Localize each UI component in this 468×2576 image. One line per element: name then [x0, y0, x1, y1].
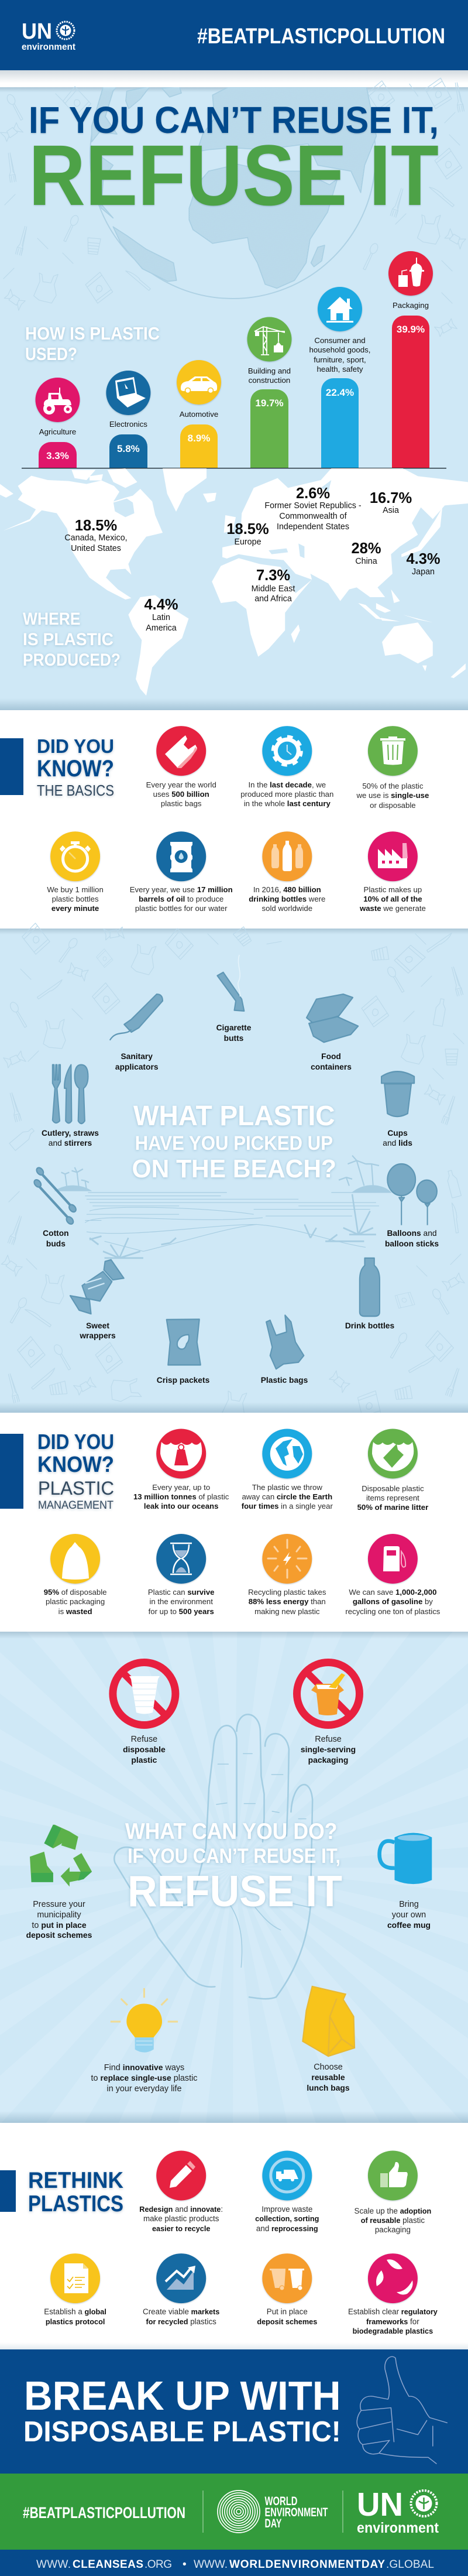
map statistics: 16.7% [370, 490, 412, 506]
heading: DID YOU [37, 735, 114, 757]
beach item labels: Sanitary [121, 1052, 153, 1061]
panel: what plastic have you picked up on the beach [0, 923, 468, 1422]
logo: world environment day: DAY [264, 2517, 282, 2530]
action: deposit schemes [257, 2253, 317, 2326]
bar: consumer goods: household goods, [309, 345, 371, 354]
beach item labels: and stirrers [49, 1139, 92, 1147]
map statistics: United States [71, 544, 121, 553]
action: refuse single-serving packaging: packaging [308, 1755, 348, 1765]
beach item labels: Drink bottles [345, 1321, 394, 1330]
logo: world environment day: WORLD [264, 2495, 297, 2508]
panel: did you know plastic management [0, 1413, 468, 1632]
action: refuse disposable plastic [113, 1663, 176, 1765]
fact: plastic bags [146, 726, 216, 808]
fact: plastic bottles per minute: every minute [51, 904, 99, 913]
bar chart: plastic use by sector [22, 251, 446, 468]
bar: building and construction: construction [249, 376, 290, 385]
action: redesign [139, 2151, 223, 2233]
fact: last decade: in the whole last century [244, 799, 331, 808]
fact: barrels of oil: plastic bottles for our water [135, 904, 228, 913]
fact: packaging wasted: is wasted [58, 1607, 92, 1616]
heading: PLASTICS [28, 2191, 123, 2217]
fact: last decade: In the last decade, we [248, 780, 326, 789]
heading: WHAT CAN YOU DO? [125, 1819, 337, 1844]
fact: single use [356, 726, 429, 810]
panel: break up banner [0, 2349, 468, 2474]
fact: survive 500 years: Plastic can survive [148, 1588, 215, 1597]
beach item labels: balloon sticks [385, 1239, 439, 1248]
action: improve waste collection: collection, sorting [255, 2215, 319, 2223]
action: regulatory frameworks [348, 2253, 438, 2335]
bar: agriculture: Agriculture [39, 427, 76, 436]
panel: footer links: WWW. [194, 2558, 228, 2571]
action: innovative ways [91, 1988, 198, 2094]
action: markets: Create viable markets [143, 2307, 219, 2316]
heading [0, 735, 114, 799]
action: protocol: plastics protocol [46, 2318, 105, 2326]
heading: ON THE BEACH? [132, 1155, 336, 1183]
panel: footer links: WORLDENVIRONMENTDAY [229, 2558, 385, 2571]
icon: drink bottle [360, 1258, 380, 1316]
heading: how is plastic used [25, 323, 160, 364]
fact: barrels of oil: barrels of oil to produce [139, 895, 223, 903]
icon: sanitary applicator [110, 994, 163, 1040]
fact: share of waste [359, 831, 426, 913]
fact: last decade: produced more plastic than [240, 790, 333, 799]
fact: plastic bags: Every year the world [146, 780, 216, 789]
fact: drinking bottles: In 2016, 480 billion [253, 885, 321, 894]
heading: DISPOSABLE PLASTIC! [23, 2416, 341, 2448]
bar: automotive: Automotive [180, 410, 218, 419]
fact: packaging wasted: 95% of disposable [44, 1588, 106, 1597]
map statistics: China [355, 557, 377, 566]
panel: did you know the basics [0, 710, 468, 929]
heading: THE BASICS [37, 782, 114, 799]
bar: consumer goods: 22.4% [326, 387, 354, 398]
icon: thumbs up line art [357, 2356, 447, 2464]
fact: gasoline [345, 1534, 441, 1616]
action: coffee mug: your own [392, 1910, 426, 1920]
fact: drinking bottles: sold worldwide [262, 904, 312, 913]
UN environment logo: UN [22, 19, 52, 44]
map statistics: 18.5% [226, 521, 269, 537]
logo: world environment day [218, 2491, 328, 2533]
action: markets: for recycled plastics [146, 2317, 216, 2326]
UN environment logo [22, 19, 76, 52]
map statistics: 4.3% [406, 551, 441, 567]
fact: last decade [240, 726, 333, 808]
action: improve waste collection: and reprocessing [256, 2224, 318, 2233]
heading: KNOW? [37, 756, 114, 782]
action: redesign: easier to recycle [152, 2225, 210, 2233]
action: deposit schemes: deposit schemes [26, 1930, 92, 1940]
heading: where is plastic produced: IS PLASTIC [23, 630, 113, 649]
fact: single use: 50% of the plastic [362, 782, 424, 790]
bar: consumer goods: Consumer and [314, 336, 366, 345]
icon: cigarette butt [217, 955, 244, 1011]
bar: automotive: 8.9% [188, 433, 210, 444]
fact: circle the earth: away can circle the Earth [242, 1492, 332, 1501]
action: regulatory frameworks: frameworks for [366, 2317, 419, 2326]
heading: RETHINK [28, 2168, 123, 2193]
fact: packaging wasted: plastic packaging [46, 1597, 105, 1606]
action: innovative ways: to replace single-use plastic [91, 2073, 198, 2083]
action: improve waste collection: Improve waste [261, 2205, 312, 2214]
heading: where is plastic produced: PRODUCED? [23, 650, 121, 670]
panel: how plastic is used and where produced [0, 13, 468, 710]
map statistics: Japan [412, 567, 435, 577]
background doodles [1, 77, 466, 338]
icon: crisp packet [167, 1319, 201, 1365]
fact: drinking bottles: drinking bottles were [249, 895, 325, 903]
fact: plastic bottles per minute: plastic bottles [52, 895, 99, 903]
fact: survive 500 years: in the environment [149, 1597, 213, 1606]
map statistics [64, 485, 441, 633]
heading: where is plastic produced [23, 609, 121, 670]
fact: recycling energy: making new plastic [254, 1607, 320, 1616]
heading: WHAT PLASTIC [133, 1101, 335, 1132]
bar: building and construction: Building and [248, 366, 291, 375]
fact: recycling energy [248, 1534, 326, 1616]
map statistics: Europe [234, 537, 261, 547]
icon: balloons [387, 1164, 437, 1225]
heading [125, 1819, 342, 1916]
heading [0, 2168, 123, 2217]
map statistics: America [146, 624, 177, 633]
action: reusable packaging [355, 2151, 431, 2234]
sunburst rays [0, 1633, 468, 2102]
action: coffee mug: coffee mug [387, 1920, 431, 1930]
fact: drinking bottles [249, 831, 325, 913]
bar: consumer goods [309, 287, 371, 468]
map statistics: Latin [152, 613, 170, 622]
action: deposit schemes: Put in place [267, 2307, 308, 2316]
action: protocol [44, 2253, 106, 2326]
fact: plastic bags: plastic bags [161, 799, 202, 808]
fact: circle the earth: four times in a single year [242, 1502, 333, 1510]
icon: sweet wrapper [70, 1260, 124, 1314]
action: deposit schemes: deposit schemes [257, 2318, 317, 2326]
action: coffee mug [380, 1833, 432, 1930]
heading [23, 2373, 341, 2448]
action: refuse disposable plastic: Refuse [131, 1735, 157, 1744]
action: reusable packaging: Scale up the adoption [355, 2207, 431, 2215]
background doodles [1, 923, 464, 1422]
logo: UN environment: environment [357, 2520, 439, 2536]
title: IF YOU CAN’T REUSE IT, [29, 99, 439, 141]
heading [132, 1101, 336, 1183]
fact: share of waste: Plastic makes up [364, 885, 422, 894]
action: deposit schemes: Pressure your [33, 1900, 85, 1909]
panel: footer links: .ORG [144, 2558, 172, 2571]
heading: HAVE YOU PICKED UP [135, 1132, 333, 1155]
fact: share of waste: 10% of all of the [363, 895, 422, 903]
beach item labels: butts [224, 1034, 244, 1043]
action: improve waste collection [255, 2151, 319, 2233]
action: redesign: make plastic products [143, 2214, 219, 2223]
beach item labels: Cutlery, straws [42, 1129, 99, 1138]
panel: footer links [0, 2550, 468, 2576]
map statistics: 18.5% [75, 518, 117, 534]
action: lunch bags [302, 1986, 355, 2092]
action: redesign: Redesign and innovate: [139, 2205, 223, 2214]
heading: how is plastic used: HOW IS PLASTIC [25, 323, 160, 344]
fact: marine litter [357, 1429, 428, 1512]
fact: leak into oceans [133, 1429, 229, 1510]
panel: footer links: WWW. [36, 2558, 71, 2571]
map statistics: Middle East [252, 584, 295, 594]
beach item labels: wrappers [79, 1331, 116, 1340]
fact: gasoline: recycling one ton of plastics [345, 1607, 441, 1616]
action: lunch bags: Choose [314, 2063, 343, 2072]
bar: building and construction: 19.7% [255, 398, 284, 409]
map statistics: Former Soviet Republics - [264, 501, 362, 511]
logo: world environment day: ENVIRONMENT [264, 2506, 328, 2519]
heading: KNOW? [37, 1453, 114, 1477]
fact: circle the earth [242, 1429, 333, 1510]
map statistics: Independent States [277, 522, 349, 532]
beach item labels: buds [46, 1239, 66, 1248]
icon: cotton buds [33, 1166, 77, 1225]
hatched globe [90, 87, 377, 299]
map statistics: 2.6% [296, 485, 330, 502]
fact: survive 500 years [148, 1534, 215, 1616]
bar: agriculture [35, 378, 80, 468]
bar: packaging: 39.9% [397, 324, 425, 335]
fact: barrels of oil: Every year, we use 17 million [130, 885, 233, 894]
action: refuse single-serving packaging: single-serving [301, 1745, 356, 1754]
bar: consumer goods: furniture, sport, [314, 355, 366, 364]
heading: IF YOU CAN’T REUSE IT, [128, 1845, 340, 1868]
fact: plastic bottles per minute: We buy 1 million [47, 885, 104, 894]
action: refuse single-serving packaging [297, 1663, 359, 1765]
fact: single use: or disposable [370, 801, 416, 810]
logo: UN environment [357, 2486, 439, 2536]
action: markets [143, 2253, 219, 2326]
items on the beach [33, 955, 437, 1369]
heading: REFUSE IT [128, 1866, 342, 1916]
action: innovative ways: Find innovative ways [104, 2063, 184, 2073]
bar: electronics: 5.8% [117, 443, 140, 454]
bar: packaging: Packaging [393, 301, 429, 310]
fact: circle the earth: The plastic we throw [252, 1483, 322, 1492]
fact: packaging wasted [44, 1534, 106, 1616]
icon: food container [307, 994, 358, 1042]
bar: consumer goods: health, safety [316, 365, 363, 374]
fact: leak into oceans: Every year, up to [152, 1483, 210, 1492]
logo: UN environment: UN [357, 2486, 403, 2523]
action: reusable packaging: of reusable plastic [361, 2216, 425, 2225]
fact: plastic bags: uses 500 billion [153, 790, 209, 799]
beach item labels: Cups [387, 1129, 408, 1138]
fact: marine litter: items represent [366, 1493, 419, 1502]
fact: marine litter: 50% of marine litter [357, 1503, 428, 1512]
beach item labels: Cigarette [216, 1023, 252, 1032]
hand outline [114, 1714, 312, 1999]
beach item labels: and lids [383, 1139, 412, 1147]
fact: survive 500 years: for up to 500 years [149, 1607, 214, 1616]
UN environment logo: environment [22, 42, 76, 52]
fact: leak into oceans: leak into our oceans [144, 1502, 218, 1510]
beach item labels [42, 1023, 439, 1385]
map statistics: Asia [383, 506, 399, 515]
hashtag: #BEATPLASTICPOLLUTION [23, 2504, 185, 2522]
action: deposit schemes: to put in place [32, 1920, 87, 1930]
map statistics: Canada, Mexico, [64, 533, 128, 543]
beach item labels: containers [311, 1063, 352, 1071]
bar: electronics [106, 371, 150, 468]
bar: automotive [177, 360, 221, 468]
icon: plastic bag [266, 1315, 304, 1369]
bar: electronics: Electronics [109, 420, 147, 429]
action: refuse single-serving packaging: Refuse [315, 1735, 342, 1744]
action: lunch bags: reusable [311, 2073, 345, 2082]
icon: cup with lid [381, 1071, 414, 1116]
action: lunch bags: lunch bags [307, 2083, 350, 2092]
title: REFUSE IT [29, 128, 439, 224]
bar: building and construction [247, 317, 291, 468]
map statistics: 4.4% [144, 597, 178, 613]
map statistics: 7.3% [256, 567, 290, 584]
fact: share of waste: waste we generate [359, 904, 426, 913]
heading: MANAGEMENT [38, 1499, 113, 1512]
action: refuse disposable plastic: plastic [131, 1755, 157, 1765]
panel: footer green band [0, 2474, 468, 2550]
action: innovative ways: in your everyday life [107, 2084, 181, 2094]
map statistics: Commonwealth of [279, 512, 347, 521]
icon: cutlery [53, 1065, 88, 1123]
header bar [0, 0, 468, 83]
action: protocol: Establish a global [44, 2307, 106, 2316]
world map [0, 468, 468, 696]
panel: footer links: CLEANSEAS [73, 2558, 143, 2571]
action: coffee mug: Bring [399, 1900, 419, 1909]
action: deposit schemes [26, 1824, 92, 1940]
action: reusable packaging: packaging [375, 2225, 411, 2234]
heading: how is plastic used: USED? [25, 344, 77, 364]
action: deposit schemes: municipality [37, 1910, 81, 1920]
beach item labels: Crisp packets [157, 1376, 210, 1385]
bar: agriculture: 3.3% [46, 450, 69, 461]
fact: gasoline: We can save 1,000-2,000 [349, 1588, 436, 1597]
fact: plastic bottles per minute [47, 831, 104, 913]
map statistics: 28% [351, 540, 381, 557]
panel: footer links: .GLOBAL [386, 2558, 434, 2571]
beach item labels: Sweet [86, 1321, 109, 1330]
fact: gasoline: gallons of gasoline by [353, 1597, 433, 1606]
heading: PLASTIC [38, 1478, 114, 1499]
fact: leak into oceans: 13 million tonnes of plastic [133, 1492, 229, 1501]
beach item labels: Cotton [43, 1229, 69, 1238]
beach item labels: Food [321, 1052, 341, 1061]
beach item labels: applicators [115, 1063, 159, 1071]
fact: barrels of oil [130, 831, 233, 913]
heading [0, 1430, 114, 1512]
action: regulatory frameworks: Establish clear regulatory [348, 2307, 438, 2316]
panel: what can you do [0, 1632, 468, 2123]
fact: marine litter: Disposable plastic [362, 1484, 424, 1493]
fact: recycling energy: Recycling plastic takes [248, 1588, 326, 1597]
heading: DID YOU [37, 1430, 114, 1454]
map statistics: and Africa [254, 594, 292, 604]
bar: packaging [388, 251, 433, 468]
fact: single use: we use is single-use [356, 791, 429, 800]
heading: where is plastic produced: WHERE [23, 609, 81, 629]
beach sketch [55, 1156, 391, 1258]
panel: footer links: • [183, 2558, 187, 2571]
panel: rethink plastics [0, 2123, 468, 2349]
beach item labels: Plastic bags [261, 1376, 308, 1385]
action: refuse disposable plastic: disposable [123, 1745, 166, 1754]
heading: BREAK UP WITH [24, 2373, 341, 2419]
action: regulatory frameworks: biodegradable plastics [353, 2327, 433, 2335]
fact: recycling energy: 88% less energy than [249, 1597, 326, 1606]
beach item labels: Balloons and [387, 1229, 437, 1238]
